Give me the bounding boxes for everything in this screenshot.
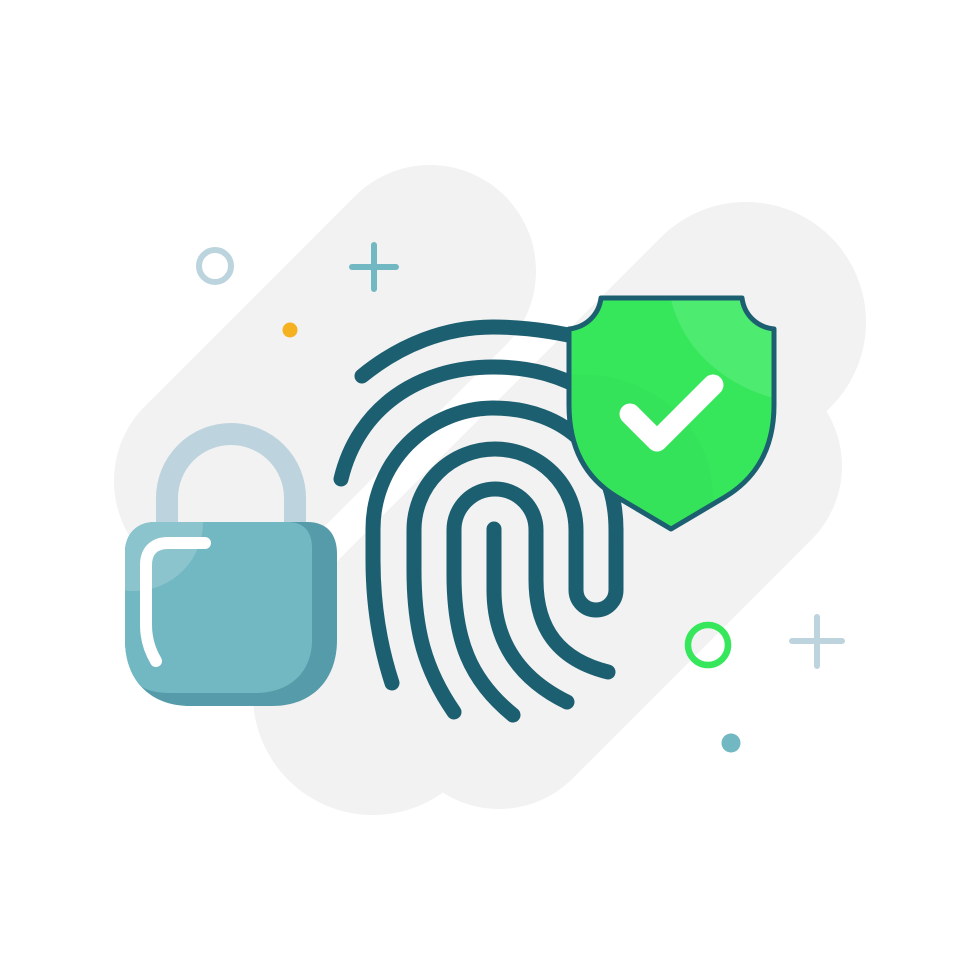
icon: orange dot (282, 322, 298, 338)
shield fill (571, 300, 772, 526)
icon: shield (560, 290, 780, 535)
padlock shackle (167, 434, 295, 530)
icon: pale plus (792, 617, 842, 666)
background blobs (220, 271, 746, 705)
icon: small ring top left (199, 250, 231, 282)
padlock highlight (146, 543, 205, 661)
icon: green ring (688, 625, 728, 665)
icon: padlock (125, 423, 337, 706)
check mark (630, 385, 713, 441)
padlock body (125, 522, 337, 706)
icon: teal dot (722, 734, 740, 752)
icon: teal plus (352, 245, 396, 289)
icon: fingerprint (341, 327, 616, 715)
shield outline (569, 298, 774, 529)
